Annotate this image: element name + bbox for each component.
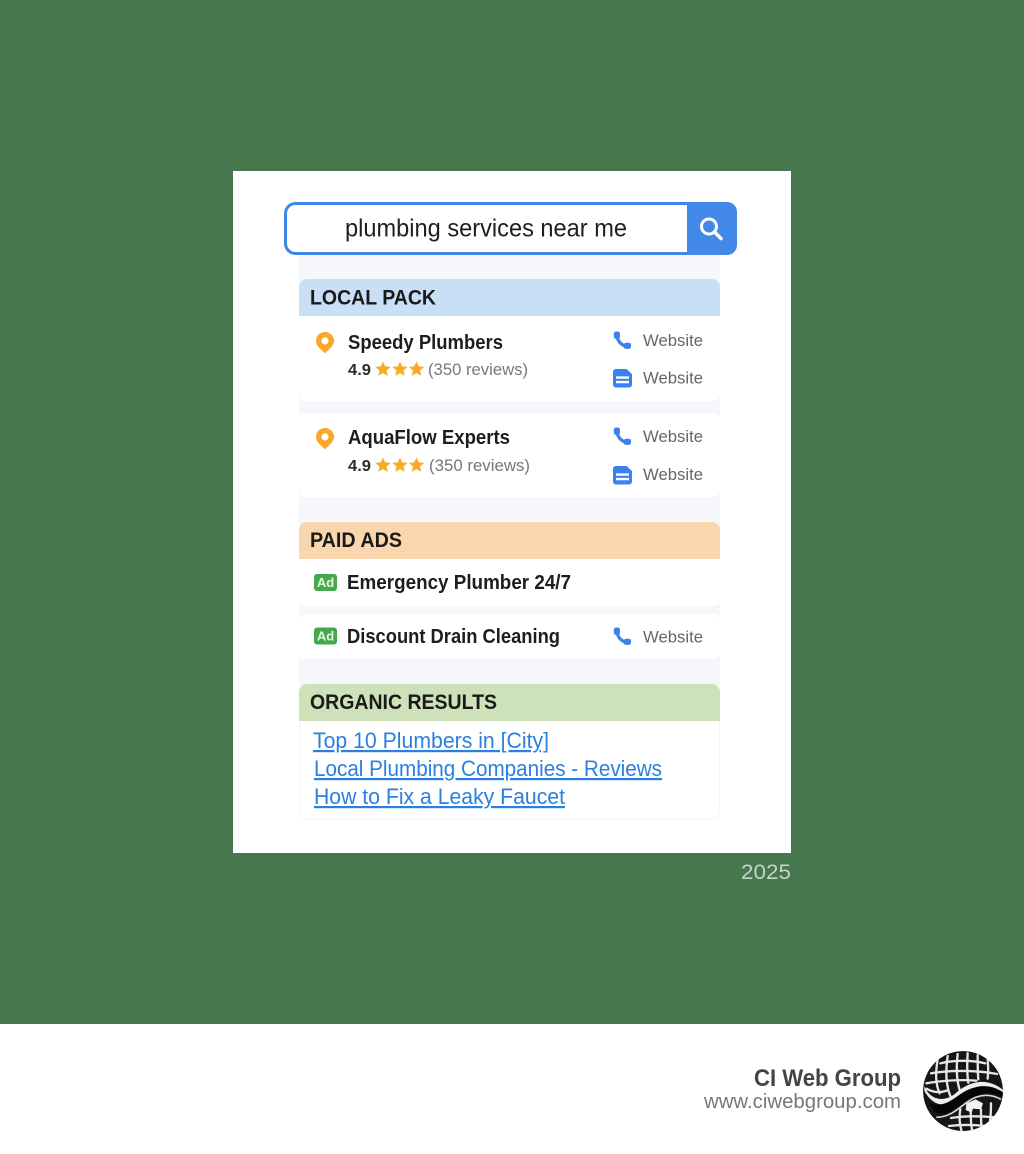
panel: local pack (299, 279, 720, 497)
icon: map pin (316, 428, 334, 450)
listing: AquaFlow Experts (299, 413, 720, 497)
local pack header: LOCAL PACK (310, 286, 436, 310)
result links (313, 728, 662, 809)
ad: Emergency Plumber: Emergency Plumber 24/7 (347, 572, 571, 594)
result links: Top 10 Plumbers in [City] (313, 728, 549, 753)
rating stars (375, 457, 424, 472)
ad: Emergency Plumber (299, 559, 720, 606)
ad badge: Ad (317, 575, 334, 590)
icon: CI Web Group globe logo (923, 1051, 1004, 1132)
search button (687, 202, 737, 255)
ad badge (314, 628, 337, 644)
listing: AquaFlow Experts: Website (643, 428, 703, 446)
listing: Speedy Plumbers (299, 316, 720, 401)
search query: plumbing services near me (345, 214, 627, 242)
paid ads header: PAID ADS (310, 529, 402, 552)
year caption: 2025 (741, 860, 791, 884)
paid ads header (299, 522, 720, 559)
local pack header (299, 279, 720, 316)
brand name: CI Web Group (754, 1065, 901, 1092)
icon: magnifier (702, 219, 721, 238)
brand url: www.ciwebgroup.com (703, 1091, 901, 1113)
listing: Speedy Plumbers: Speedy Plumbers (348, 332, 503, 354)
panel: search results card (233, 171, 791, 853)
organic results body (300, 721, 720, 819)
footer band (0, 1024, 1024, 1154)
icon: phone (614, 628, 631, 645)
icon: phone (614, 428, 631, 445)
panel: paid ads (299, 522, 720, 659)
icon: phone (614, 332, 631, 349)
ad badge: Ad (317, 628, 334, 644)
listing: Speedy Plumbers: 4.9 (348, 362, 371, 379)
logo swoosh (924, 1082, 1003, 1104)
listing: Speedy Plumbers: Website (643, 370, 703, 388)
organic results header (299, 684, 720, 721)
listing: AquaFlow Experts: AquaFlow Experts (348, 427, 510, 449)
icon: map pin (316, 332, 334, 354)
ad: Discount Drain Cleaning (299, 614, 720, 659)
icon: document (613, 369, 632, 388)
icon: document (613, 466, 632, 484)
results column backdrop (299, 255, 720, 685)
result links: How to Fix a Leaky Faucet (314, 784, 565, 809)
rating stars (375, 361, 424, 376)
listing: Speedy Plumbers: Website (643, 332, 703, 350)
listing: AquaFlow Experts: Website (643, 466, 703, 484)
ad: Discount Drain Cleaning: Website (643, 628, 703, 646)
organic results header: ORGANIC RESULTS (310, 691, 497, 714)
listing: AquaFlow Experts: (350 reviews) (429, 456, 530, 475)
listing: AquaFlow Experts: 4.9 (348, 458, 371, 475)
ad badge (314, 574, 337, 591)
listing: Speedy Plumbers: (350 reviews) (428, 360, 528, 379)
search bar (286, 202, 737, 255)
panel: organic results (299, 684, 720, 819)
ad: Discount Drain Cleaning: Discount Drain Cleaning (347, 626, 560, 648)
result links: Local Plumbing Companies - Reviews (314, 756, 662, 781)
